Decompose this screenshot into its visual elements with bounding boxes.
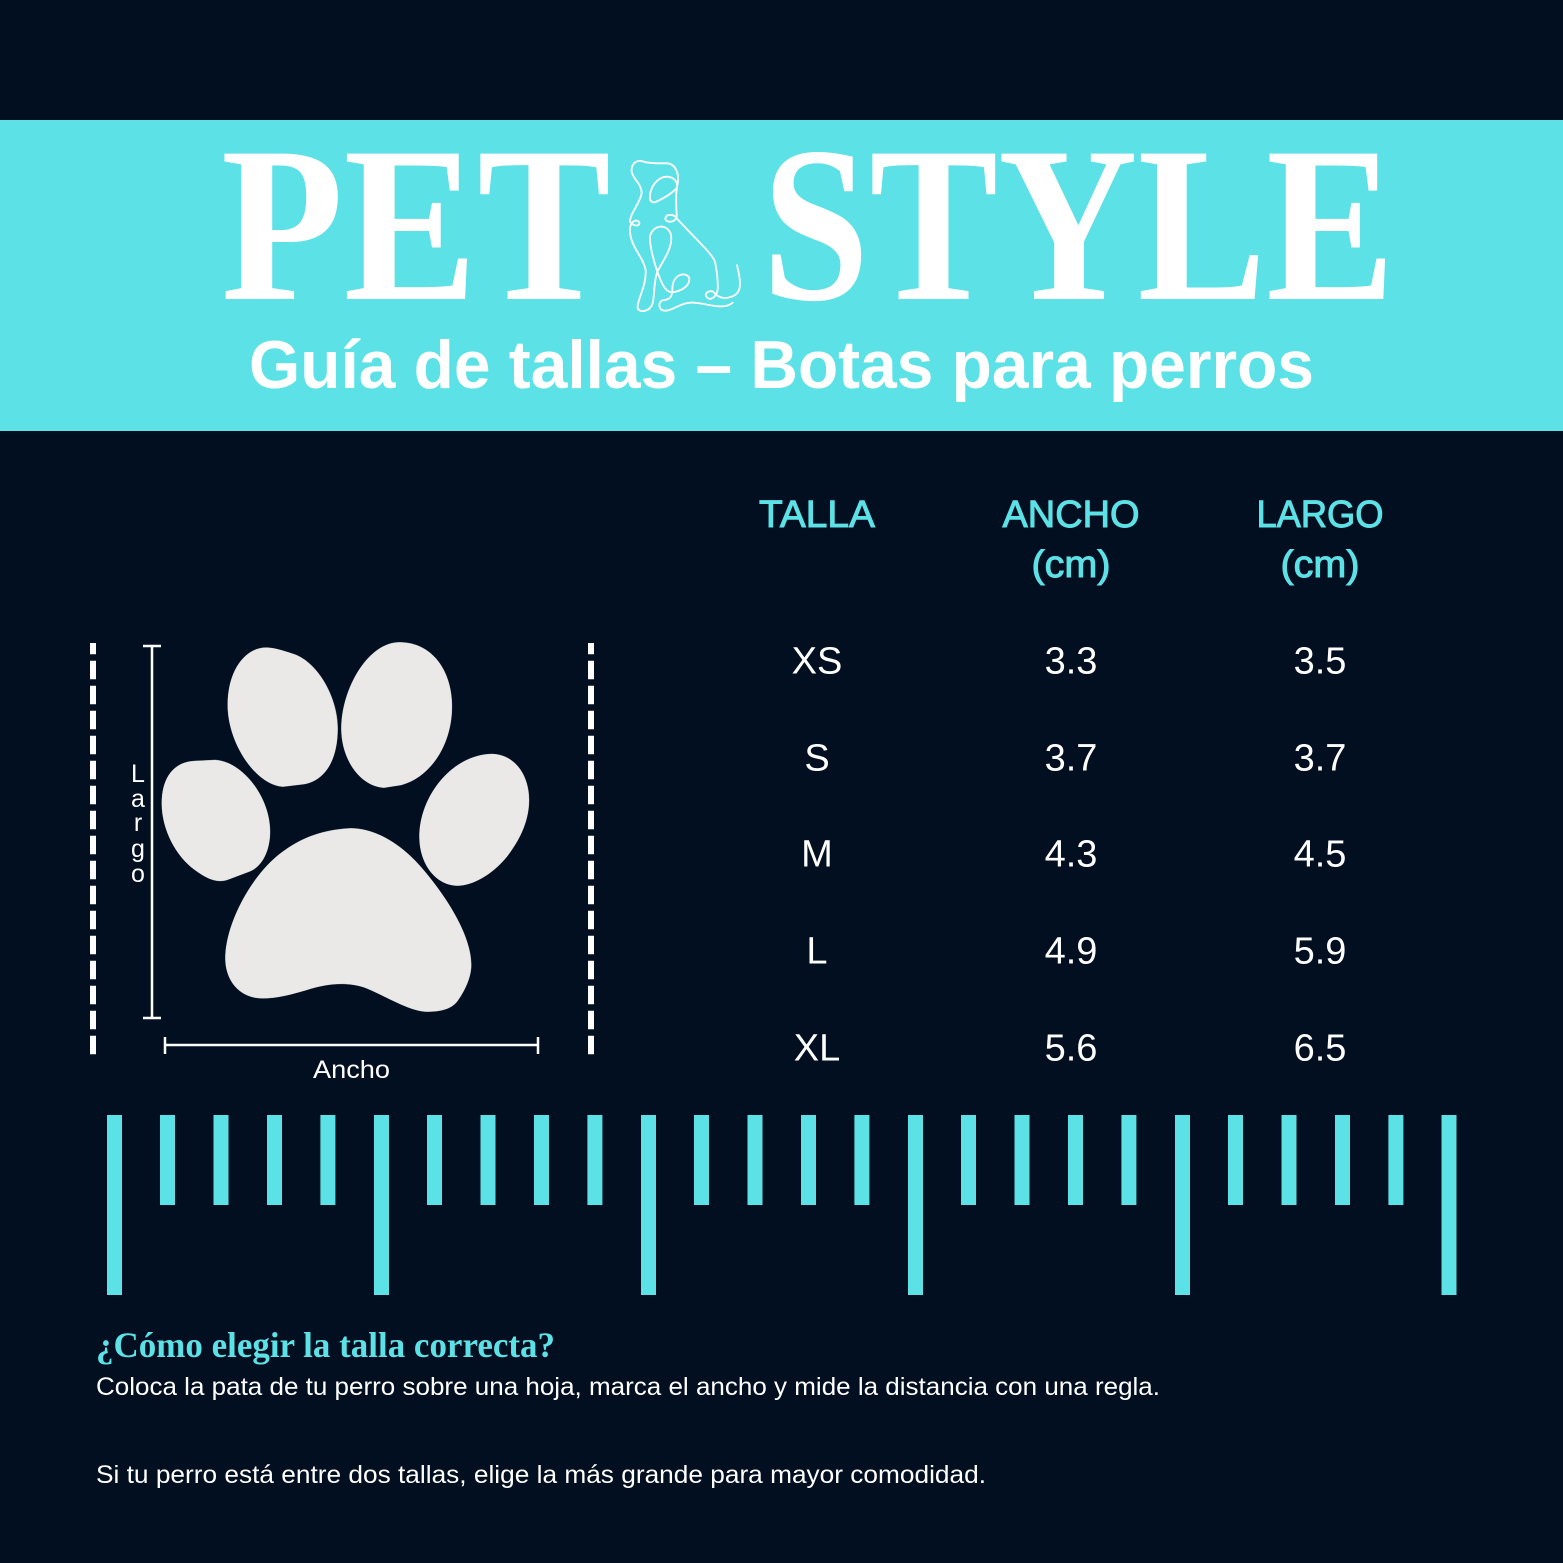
table header: (cm) (1280, 544, 1360, 586)
icon: seated dog line drawing (630, 161, 740, 311)
largo label (131, 760, 145, 888)
left dashed guide (90, 643, 96, 1055)
table header: LARGO (1256, 494, 1384, 536)
largo label: r (134, 809, 142, 837)
row L: L (806, 930, 828, 972)
table header (759, 494, 1384, 586)
instructions heading: ¿Cómo elegir la talla correcta? (96, 1325, 555, 1365)
icon: paw print (162, 642, 529, 1012)
row XS: 3.3 (1045, 640, 1097, 682)
largo label: o (131, 860, 145, 888)
row S: 3.7 (1045, 738, 1097, 780)
row XL: 5.6 (1045, 1028, 1097, 1070)
title: PET: PET (221, 102, 611, 348)
ruler ticks (107, 1115, 1456, 1295)
row XS: 3.5 (1294, 640, 1346, 682)
largo label: a (131, 785, 145, 813)
table header: ANCHO (1002, 494, 1140, 536)
ancho label: Ancho (313, 1056, 390, 1084)
row M (801, 834, 1346, 876)
row M: 4.3 (1045, 834, 1097, 876)
largo measure bar (143, 646, 161, 1018)
panel: paw measurement diagram (93, 642, 591, 1084)
row L (806, 930, 1346, 972)
right dashed guide (588, 643, 594, 1055)
row XL: XL (794, 1028, 840, 1070)
subtitle: Guía de tallas – Botas para perros (249, 327, 1314, 403)
instruction text 2: Si tu perro está entre dos tallas, elige la más grande para mayor comodidad. (96, 1461, 986, 1489)
row S: S (804, 738, 830, 780)
ancho measure bar (165, 1037, 538, 1054)
row S: 3.7 (1294, 738, 1346, 780)
row L: 5.9 (1294, 930, 1346, 972)
row L: 4.9 (1045, 930, 1097, 972)
row M: M (801, 834, 833, 876)
instructions (96, 1325, 1160, 1489)
instruction text 1: Coloca la pata de tu perro sobre una hoja, marca el ancho y mide la distancia con una regla. (96, 1373, 1160, 1401)
row M: 4.5 (1294, 834, 1346, 876)
row XL: 6.5 (1294, 1028, 1346, 1070)
panel: size table (759, 494, 1384, 1070)
row XS (792, 640, 1346, 682)
row S (804, 738, 1346, 780)
largo label: L (131, 760, 145, 788)
header banner (0, 102, 1563, 431)
title: STYLE: STYLE (762, 102, 1395, 348)
table header: (cm) (1032, 544, 1110, 586)
table header: TALLA (759, 494, 876, 536)
largo label: g (131, 835, 145, 863)
row XL (794, 1028, 1346, 1070)
row XS: XS (792, 640, 842, 682)
